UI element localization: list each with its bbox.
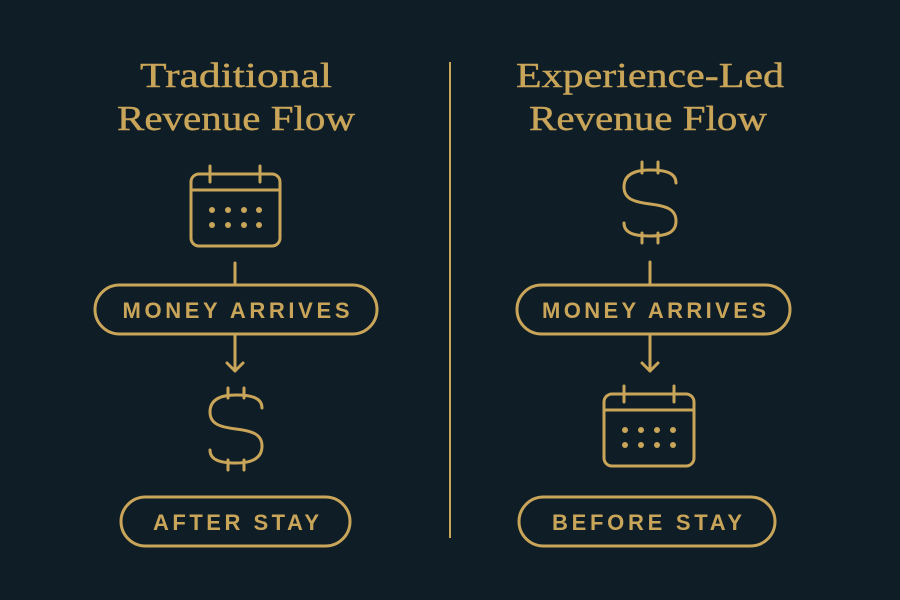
icon: calendar (604, 386, 694, 466)
panel: traditional (95, 56, 377, 546)
pill: after stay: AFTER STAY (153, 510, 319, 535)
arrow (642, 334, 658, 371)
title: traditional: Traditional (140, 56, 332, 95)
pill: after stay (121, 497, 350, 546)
pill: before stay: BEFORE STAY (552, 510, 742, 535)
arrow (227, 334, 243, 371)
title: traditional: Revenue Flow (117, 99, 356, 138)
title: experience-led: Revenue Flow (529, 99, 768, 138)
pill: money arrives (95, 285, 377, 334)
title: experience-led: Experience-Led (516, 56, 785, 95)
title: experience-led (516, 56, 785, 138)
panel: experience-led (516, 56, 790, 546)
pill: money arrives: MONEY ARRIVES (542, 298, 766, 323)
title: traditional (117, 56, 356, 138)
pill: money arrives (517, 285, 790, 334)
icon: dollar (624, 162, 676, 243)
pill: before stay (519, 497, 775, 546)
icon: calendar (191, 166, 280, 246)
icon: dollar (210, 388, 262, 470)
pill: money arrives: MONEY ARRIVES (122, 298, 350, 323)
